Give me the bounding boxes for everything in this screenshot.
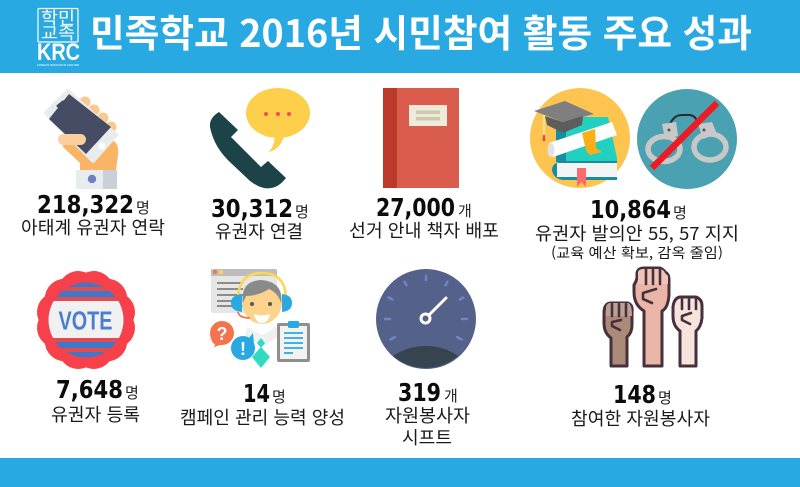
stat: 30,312: [211, 194, 309, 244]
stat: 7,648: 명: [125, 382, 139, 403]
fist: left brown: [604, 303, 632, 366]
icon: speedometer gauge: [376, 269, 476, 369]
stat: 148: 148: [613, 380, 656, 409]
stat: 7,648: 7,648: [56, 375, 123, 404]
stat: 218,322: 명: [136, 197, 150, 218]
title: 민족학교 2016년 시민참여 활동 주요 성과: [90, 3, 752, 58]
stat: 10,864: 유권자 발의안 55, 57 지지: [535, 220, 739, 246]
stat: 27,000: 개: [458, 200, 472, 221]
icon: vote badge: VOTE: [58, 306, 112, 336]
stat: 319: [385, 378, 470, 450]
footer band: [0, 458, 800, 487]
icon: call center agent: [210, 269, 310, 368]
icon: hand holding phone: [46, 91, 118, 189]
icon: red booklet: [383, 88, 459, 188]
icon: crossed-out handcuffs: [637, 89, 737, 189]
stat: 218,322: [21, 190, 165, 240]
stat: 30,312: 유권자 연결: [215, 218, 303, 244]
stat: 10,864: (교육 예산 확보, 감옥 줄임): [551, 243, 723, 263]
stat: 218,322: 218,322: [37, 190, 134, 219]
stat: 14: 명: [272, 386, 286, 407]
stat: 27,000: 27,000: [376, 193, 455, 222]
stat: 319: 319: [398, 378, 441, 407]
stat: 14: 14: [243, 379, 270, 408]
stat: 319: 개: [444, 385, 458, 406]
stat: 7,648: [51, 375, 140, 427]
logo: KRC: [37, 4, 80, 67]
icon: three raised fists: [604, 268, 702, 366]
stat: 14: [180, 379, 345, 430]
logo: KRC: KOREAN RESOURCE CENTER: [37, 63, 80, 67]
header band: [0, 0, 800, 73]
stat: 10,864: 10,864: [590, 195, 671, 224]
stat: 27,000: 선거 안내 책자 배포: [349, 217, 499, 243]
icon: call center agent: ?: [216, 324, 228, 344]
stat: 14: 캠페인 관리 능력 양성: [180, 404, 345, 430]
stat: 27,000: [349, 193, 499, 243]
stat: 319: 시프트: [402, 424, 452, 450]
icon: vote badge: [37, 271, 135, 369]
logo: KRC: KRC: [37, 39, 80, 66]
stat: 30,312: 30,312: [211, 194, 293, 223]
icon: call center agent: !: [240, 339, 246, 359]
logo: KRC: 학민: [41, 4, 75, 29]
fist: middle pink: [634, 268, 669, 366]
stat: 10,864: 명: [673, 202, 687, 223]
stat: 218,322: 아태계 유권자 연락: [21, 214, 165, 240]
icon: education books and diploma: [530, 88, 630, 188]
stat: 30,312: 명: [295, 201, 309, 222]
stat: 10,864: [535, 195, 739, 263]
stat: 7,648: 유권자 등록: [51, 401, 140, 427]
fist: right pale: [673, 297, 702, 366]
logo: KRC: 교족: [41, 19, 75, 44]
stat: 148: [571, 380, 710, 431]
icon: telephone with speech bubble: [210, 88, 310, 188]
stat: 148: 참여한 자원봉사자: [571, 405, 710, 431]
stat: 148: 명: [658, 387, 672, 408]
stat: 319: 자원봉사자: [385, 402, 470, 428]
